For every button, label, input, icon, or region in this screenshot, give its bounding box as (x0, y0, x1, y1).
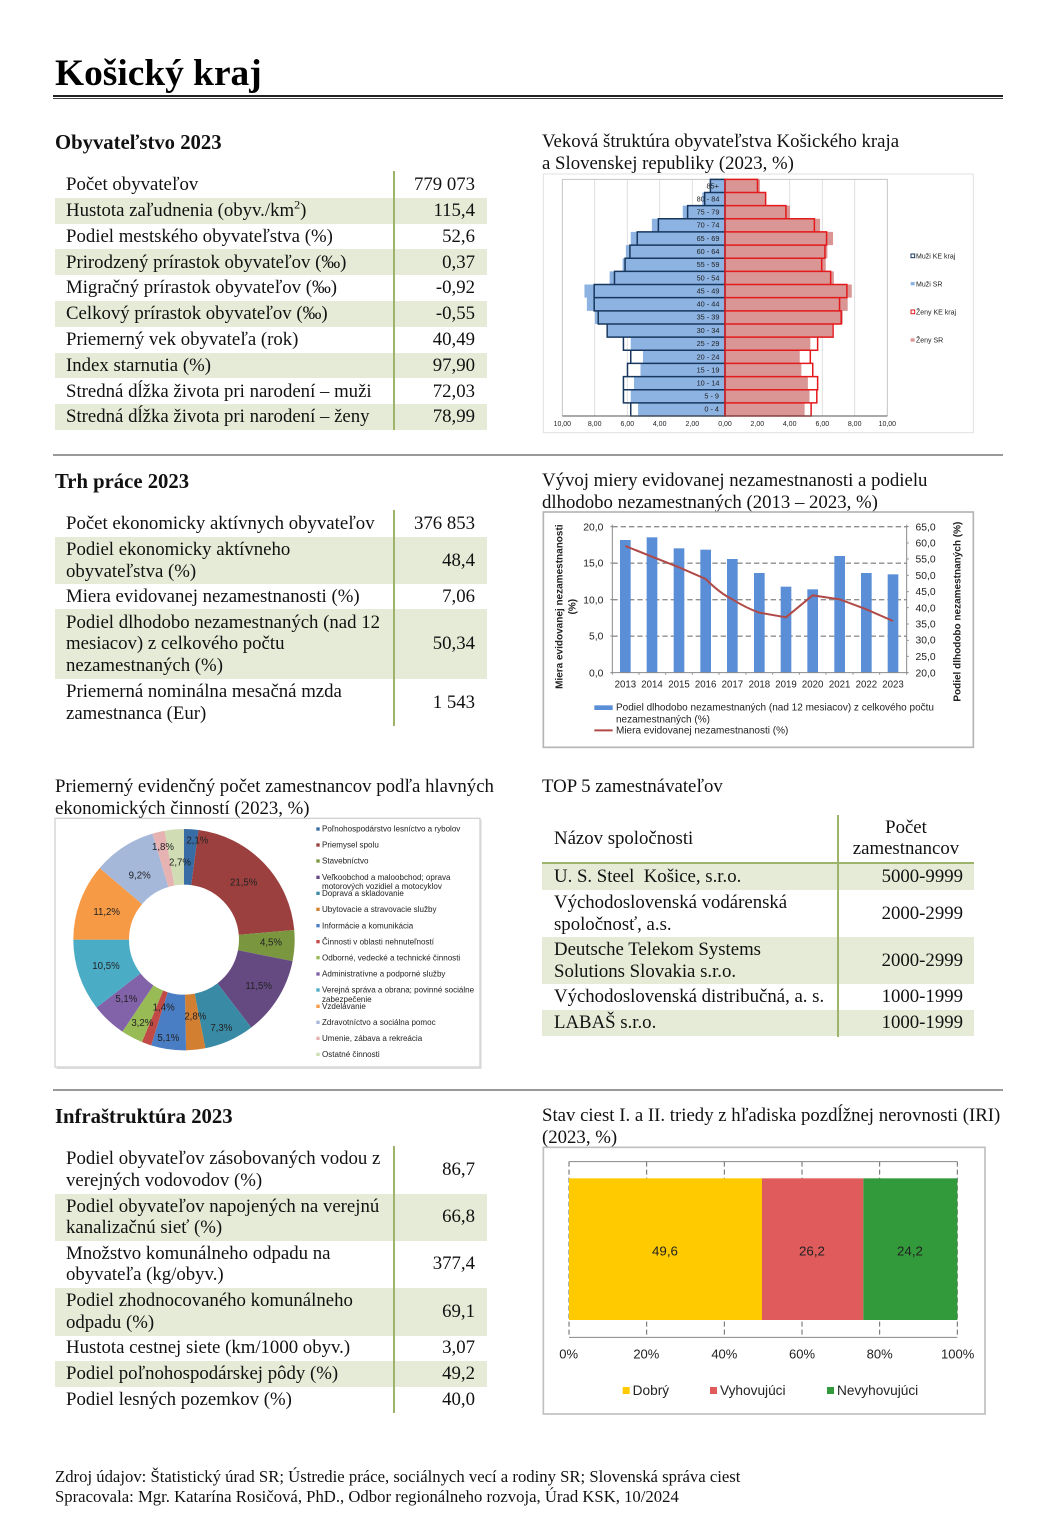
donut segments (101, 857, 267, 1022)
donut labels: 21,5% (230, 877, 258, 888)
right axis labels: 30,0 (916, 636, 936, 647)
table: labour market (55, 510, 487, 726)
donut legend: Informácie a komunikácia (322, 921, 414, 930)
bars (620, 537, 898, 673)
right axis labels: 40,0 (916, 603, 936, 614)
right axis labels: 55,0 (916, 555, 936, 566)
year labels: 2015 (668, 679, 690, 690)
right axis labels: 20,0 (916, 668, 936, 679)
left axis labels: 10,0 (583, 595, 604, 606)
table: infrastructure: 69,1 (442, 1301, 475, 1322)
donut labels: 2,8% (184, 1012, 207, 1023)
year labels: 2021 (829, 679, 850, 690)
age labels: 50 - 54 (697, 273, 719, 282)
legend (594, 703, 934, 737)
age labels: 0 - 4 (704, 405, 719, 414)
table: population: -0,55 (436, 303, 475, 324)
table: population: Prirodzený prírastok obyvateľov (‰) (66, 252, 346, 273)
age labels: 75 - 79 (697, 208, 719, 217)
table: infrastructure: Podiel zhodnocovaného komunálneho (66, 1290, 353, 1311)
axis labels: 8,00 (848, 421, 862, 428)
left axis labels: 0,0 (589, 668, 604, 679)
axis labels: 6,00 (816, 421, 829, 428)
axis titles (555, 522, 964, 702)
right axis labels: 60,0 (916, 538, 936, 549)
donut legend: Administratívne a podporné služby (322, 970, 445, 979)
table: population: Priemerný vek obyvateľa (rok) (66, 329, 298, 350)
table: top employers: LABAŠ s.r.o. (554, 1012, 656, 1033)
year labels: 2022 (856, 679, 877, 690)
table: infrastructure: Podiel lesných pozemkov (%) (66, 1389, 292, 1410)
table: labour market: 376 853 (414, 513, 475, 534)
legend: Miera evidovanej nezamestnanosti (%) (616, 726, 788, 737)
table: population: Index starnutia (%) (66, 355, 211, 376)
legend: nezamestnaných (%) (616, 714, 710, 725)
donut labels: 7,3% (210, 1023, 233, 1034)
donut legend (316, 825, 475, 1059)
donut labels: 2,7% (169, 857, 191, 868)
table: labour market: 7,06 (442, 586, 475, 607)
table: top employers: 2000-2999 (882, 903, 963, 924)
year labels: 2020 (802, 679, 823, 690)
table: population: 0,37 (442, 252, 475, 273)
axis labels: 10,00 (879, 421, 896, 428)
table: top employers: Solutions Slovakia s.r.o. (554, 960, 736, 982)
table: infrastructure: 86,7 (442, 1159, 475, 1180)
table: population: Hustota zaľudnenia (obyv./km2) (66, 198, 306, 221)
axis labels: 0,00 (718, 421, 732, 428)
left axis labels (583, 522, 604, 679)
axis labels: 4,00 (653, 421, 667, 428)
age labels (697, 181, 719, 414)
axis labels: 40% (711, 1347, 738, 1362)
legend (623, 1383, 918, 1398)
legend: Muži SR (916, 281, 942, 288)
donut labels: 11,2% (93, 907, 120, 918)
axis labels (554, 421, 896, 428)
right axis labels: 50,0 (916, 571, 936, 582)
table: population: Stredná dĺžka života pri narodení – ženy (66, 406, 370, 427)
chart: age pyramid (542, 174, 974, 434)
right axis labels: 25,0 (916, 652, 936, 663)
age labels: 30 - 34 (697, 326, 719, 335)
donut legend: Ostatné činnosti (322, 1050, 380, 1059)
table: population: Stredná dĺžka života pri narodení – muži (66, 381, 372, 402)
donut labels: 1,8% (152, 842, 174, 853)
right axis labels: 45,0 (916, 587, 936, 598)
table: labour market: nezamestnaných (%) (66, 655, 223, 676)
age labels: 15 - 19 (697, 365, 719, 374)
donut legend: Odborné, vedecké a technické činnosti (322, 953, 460, 962)
year labels: 2017 (722, 679, 743, 690)
table: labour market: 48,4 (442, 550, 475, 571)
axis labels: 4,00 (783, 421, 797, 428)
table: infrastructure: Hustota cestnej siete (km/1000 obyv.) (66, 1337, 350, 1358)
axis labels: 0% (559, 1347, 578, 1362)
left axis labels: 20,0 (583, 522, 604, 533)
pyramid bars (584, 179, 852, 416)
age labels: 85+ (706, 181, 719, 190)
donut labels: 10,5% (92, 961, 120, 972)
legend: Podiel dlhodobo nezamestnaných (nad 12 mesiacov) z celkového počtu (616, 703, 934, 714)
age labels: 10 - 14 (697, 378, 719, 387)
heading: Infraštruktúra 2023: Infraštruktúra 2023 (55, 1106, 233, 1128)
donut legend: Činnosti v oblasti nehnuteľností (322, 937, 435, 946)
axis labels: 100% (941, 1347, 975, 1362)
table: infrastructure: Podiel obyvateľov napojených na verejnú (66, 1196, 379, 1217)
donut labels: 5,1% (157, 1033, 180, 1044)
donut legend: zabezpečenie (322, 995, 372, 1004)
table: infrastructure: kanalizačnú sieť (%) (66, 1217, 222, 1238)
table: infrastructure (55, 1146, 487, 1413)
table: population: Celkový prírastok obyvateľov (‰) (66, 303, 328, 324)
table: infrastructure: verejných vodovodov (%) (66, 1170, 262, 1190)
left axis labels: 15,0 (583, 559, 604, 570)
donut legend: Doprava a skladovanie (322, 889, 404, 898)
heading: road chart: Stav ciest I. a II. triedy z hľadiska pozdĺžnej nerovnosti (IRI) (542, 1105, 1000, 1126)
heading: road chart: (2023, %) (542, 1126, 617, 1148)
age labels: 20 - 24 (697, 352, 719, 361)
age labels: 25 - 29 (697, 339, 719, 348)
table: population: Migračný prírastok obyvateľov (‰) (66, 277, 337, 298)
heading: employees chart: ekonomických činností (2023, %) (55, 798, 310, 819)
table: top employers: 2000-2999 (882, 950, 963, 971)
donut legend: Ubytovacie a stravovacie služby (322, 905, 436, 914)
table: top employers: 1000-1999 (882, 986, 963, 1007)
table: top employers: 5000-9999 (882, 866, 963, 887)
legend (911, 253, 957, 345)
table: top employers: U. S. Steel Košice, s.r.o. (554, 866, 741, 887)
table: top employers: Východoslovenská distribučná, a. s. (554, 986, 824, 1007)
right axis labels: 35,0 (916, 620, 936, 631)
table: top employers: zamestnancov (853, 838, 959, 859)
donut legend: Vzdelávanie (322, 1002, 366, 1011)
table: labour market: zamestnanca (Eur) (66, 702, 206, 724)
axis labels: 6,00 (621, 421, 634, 428)
year labels: 2016 (695, 679, 716, 690)
axis labels: 60% (789, 1347, 815, 1362)
source note: Spracovala: Mgr. Katarína Rosičová, PhD., Odbor regionálneho rozvoja, Úrad KSK, 10/2024 (55, 1486, 679, 1506)
heading: age pyramid (542, 131, 899, 174)
stacked bar (569, 1178, 957, 1320)
heading: employees chart (55, 776, 494, 819)
age labels: 55 - 59 (697, 260, 719, 269)
heading: age pyramid: Veková štruktúra obyvateľstva Košického kraja (542, 131, 899, 152)
age labels: 45 - 49 (697, 286, 719, 295)
donut labels (92, 836, 282, 1044)
table: population: 72,03 (433, 381, 475, 402)
legend: Nevyhovujúci (837, 1383, 918, 1398)
table: labour market: Podiel ekonomicky aktívneho (66, 539, 290, 560)
table: infrastructure: obyvateľa (kg/obyv.) (66, 1264, 224, 1285)
heading: TOP 5: TOP 5 zamestnávateľov (542, 776, 723, 797)
table: population: 78,99 (433, 406, 475, 427)
donut labels: 11,5% (245, 981, 272, 992)
source note: Zdroj údajov: Štatistický úrad SR; Ústredie práce, sociálnych vecí a rodiny SR; Slovenská správa ciest (55, 1467, 740, 1486)
donut legend: motorových vozidiel a motocyklov (322, 882, 442, 891)
table: infrastructure: 40,0 (442, 1389, 475, 1410)
table: top employers: Počet (885, 817, 927, 838)
year labels: 2018 (749, 679, 770, 690)
table: infrastructure: 377,4 (433, 1253, 475, 1274)
table: population: 779 073 (414, 174, 475, 195)
table: labour market: 50,34 (433, 633, 475, 654)
title: Košický kraj (55, 53, 262, 94)
table: infrastructure: Množstvo komunálneho odpadu na (66, 1243, 330, 1264)
age labels: 40 - 44 (697, 300, 719, 309)
table: population: 115,4 (433, 200, 475, 221)
donut labels: 2,1% (186, 836, 209, 847)
donut legend: Verejná správa a obrana; povinné sociálne (322, 986, 475, 995)
heading: unemployment chart: dlhodobo nezamestnaných (2013 – 2023, %) (542, 492, 878, 512)
age labels: 65 - 69 (697, 234, 719, 243)
heading: unemployment chart: Vývoj miery evidovanej nezamestnanosti a podielu (542, 470, 927, 491)
chart: unemployment (542, 511, 974, 748)
heading: employees chart: Priemerný evidenčný počet zamestnancov podľa hlavných (55, 776, 494, 797)
donut legend: Zdravotníctvo a sociálna pomoc (322, 1018, 436, 1027)
donut labels: 4,5% (260, 938, 282, 949)
axis labels: 2,00 (751, 421, 764, 428)
axis titles: Miera evidovanej nezamestnanosti (555, 524, 566, 689)
table: labour market: Počet ekonomicky aktívnych obyvateľov (66, 513, 375, 534)
value labels: 24,2 (897, 1244, 923, 1259)
table: population: 52,6 (442, 226, 475, 247)
right axis labels (916, 522, 936, 679)
value labels (652, 1244, 923, 1259)
value labels: 49,6 (652, 1244, 678, 1259)
year labels: 2019 (775, 679, 797, 690)
table: population: Podiel mestského obyvateľstva (%) (66, 226, 333, 247)
heading: age pyramid: a Slovenskej republiky (2023, %) (542, 153, 794, 174)
table: top employers: Deutsche Telekom Systems (554, 939, 761, 960)
table: infrastructure: 49,2 (442, 1363, 475, 1384)
table: population: -0,92 (436, 277, 475, 298)
table: top employers: Východoslovenská vodárenská (554, 892, 787, 913)
legend: Ženy KE kraj (916, 307, 957, 316)
line (625, 546, 893, 621)
donut labels: 3,2% (131, 1018, 154, 1029)
heading: Trh práce 2023: Trh práce 2023 (55, 471, 189, 493)
table: infrastructure: 66,8 (442, 1206, 475, 1227)
axis labels (559, 1347, 975, 1362)
source note (55, 1467, 740, 1506)
value labels: 26,2 (799, 1244, 825, 1259)
heading: unemployment chart (542, 470, 928, 512)
table: labour market: obyvateľstva (%) (66, 560, 196, 582)
table: labour market: Miera evidovanej nezamestnanosti (%) (66, 586, 360, 607)
donut legend: Stavebníctvo (322, 857, 369, 866)
donut labels: 9,2% (129, 870, 151, 881)
right axis labels: 65,0 (916, 522, 936, 533)
axis labels: 10,00 (554, 421, 571, 428)
axis labels: 20% (633, 1347, 660, 1362)
left axis labels: 5,0 (589, 632, 604, 643)
year labels: 2023 (882, 679, 904, 690)
table: infrastructure: 3,07 (442, 1337, 475, 1358)
table: infrastructure: Podiel poľnohospodárskej pôdy (%) (66, 1363, 338, 1384)
age labels: 70 - 74 (697, 221, 719, 230)
donut legend: Priemysel spolu (322, 841, 379, 850)
table: population: 97,90 (433, 355, 475, 376)
age labels: 5 - 9 (704, 392, 719, 401)
axis labels: 80% (867, 1347, 893, 1362)
year labels: 2014 (641, 679, 663, 690)
table: population: 40,49 (433, 329, 475, 350)
table: top employers: spoločnosť, a.s. (554, 914, 672, 934)
legend: Muži KE kraj (916, 253, 956, 260)
heading: road chart (542, 1104, 1000, 1148)
axis labels: 2,00 (686, 421, 699, 428)
table: labour market: Priemerná nominálna mesačná mzda (66, 681, 342, 702)
donut labels: 1,4% (153, 1002, 175, 1013)
donut labels: 5,1% (115, 994, 138, 1005)
age labels: 80 - 84 (697, 194, 719, 203)
donut legend: Poľnohospodárstvo lesníctvo a rybolov (322, 825, 460, 834)
legend: Dobrý (633, 1383, 669, 1398)
table: labour market: 1 543 (433, 692, 475, 713)
year labels (615, 679, 904, 690)
age labels: 35 - 39 (697, 313, 719, 322)
table: top employers: Názov spoločnosti (554, 828, 693, 849)
table: top employers (542, 815, 974, 1037)
table: top employers: 1000-1999 (882, 1012, 963, 1033)
legend: Ženy SR (916, 336, 943, 345)
chart: employees donut (54, 818, 482, 1069)
table: population: Počet obyvateľov (66, 174, 198, 195)
axis titles: Podiel dlhodobo nezamestnaných (%) (953, 522, 964, 702)
chart: road condition (542, 1146, 986, 1415)
age labels: 60 - 64 (697, 247, 719, 256)
table: labour market: Podiel dlhodobo nezamestnaných (nad 12 (66, 612, 380, 633)
donut legend: Veľkoobchod a maloobchod; oprava (322, 873, 451, 882)
table: infrastructure: odpadu (%) (66, 1312, 154, 1332)
table: population (55, 171, 487, 430)
donut legend: Umenie, zábava a rekreácia (322, 1034, 423, 1043)
legend: Vyhovujúci (720, 1383, 786, 1398)
table: infrastructure: Podiel obyvateľov zásobovaných vodou z (66, 1148, 380, 1169)
year labels: 2013 (615, 679, 636, 690)
axis titles: (%) (567, 599, 578, 614)
axis labels: 8,00 (588, 421, 602, 428)
heading: Obyvateľstvo 2023: Obyvateľstvo 2023 (55, 132, 222, 154)
table: labour market: mesiacov) z celkového počtu (66, 633, 285, 654)
